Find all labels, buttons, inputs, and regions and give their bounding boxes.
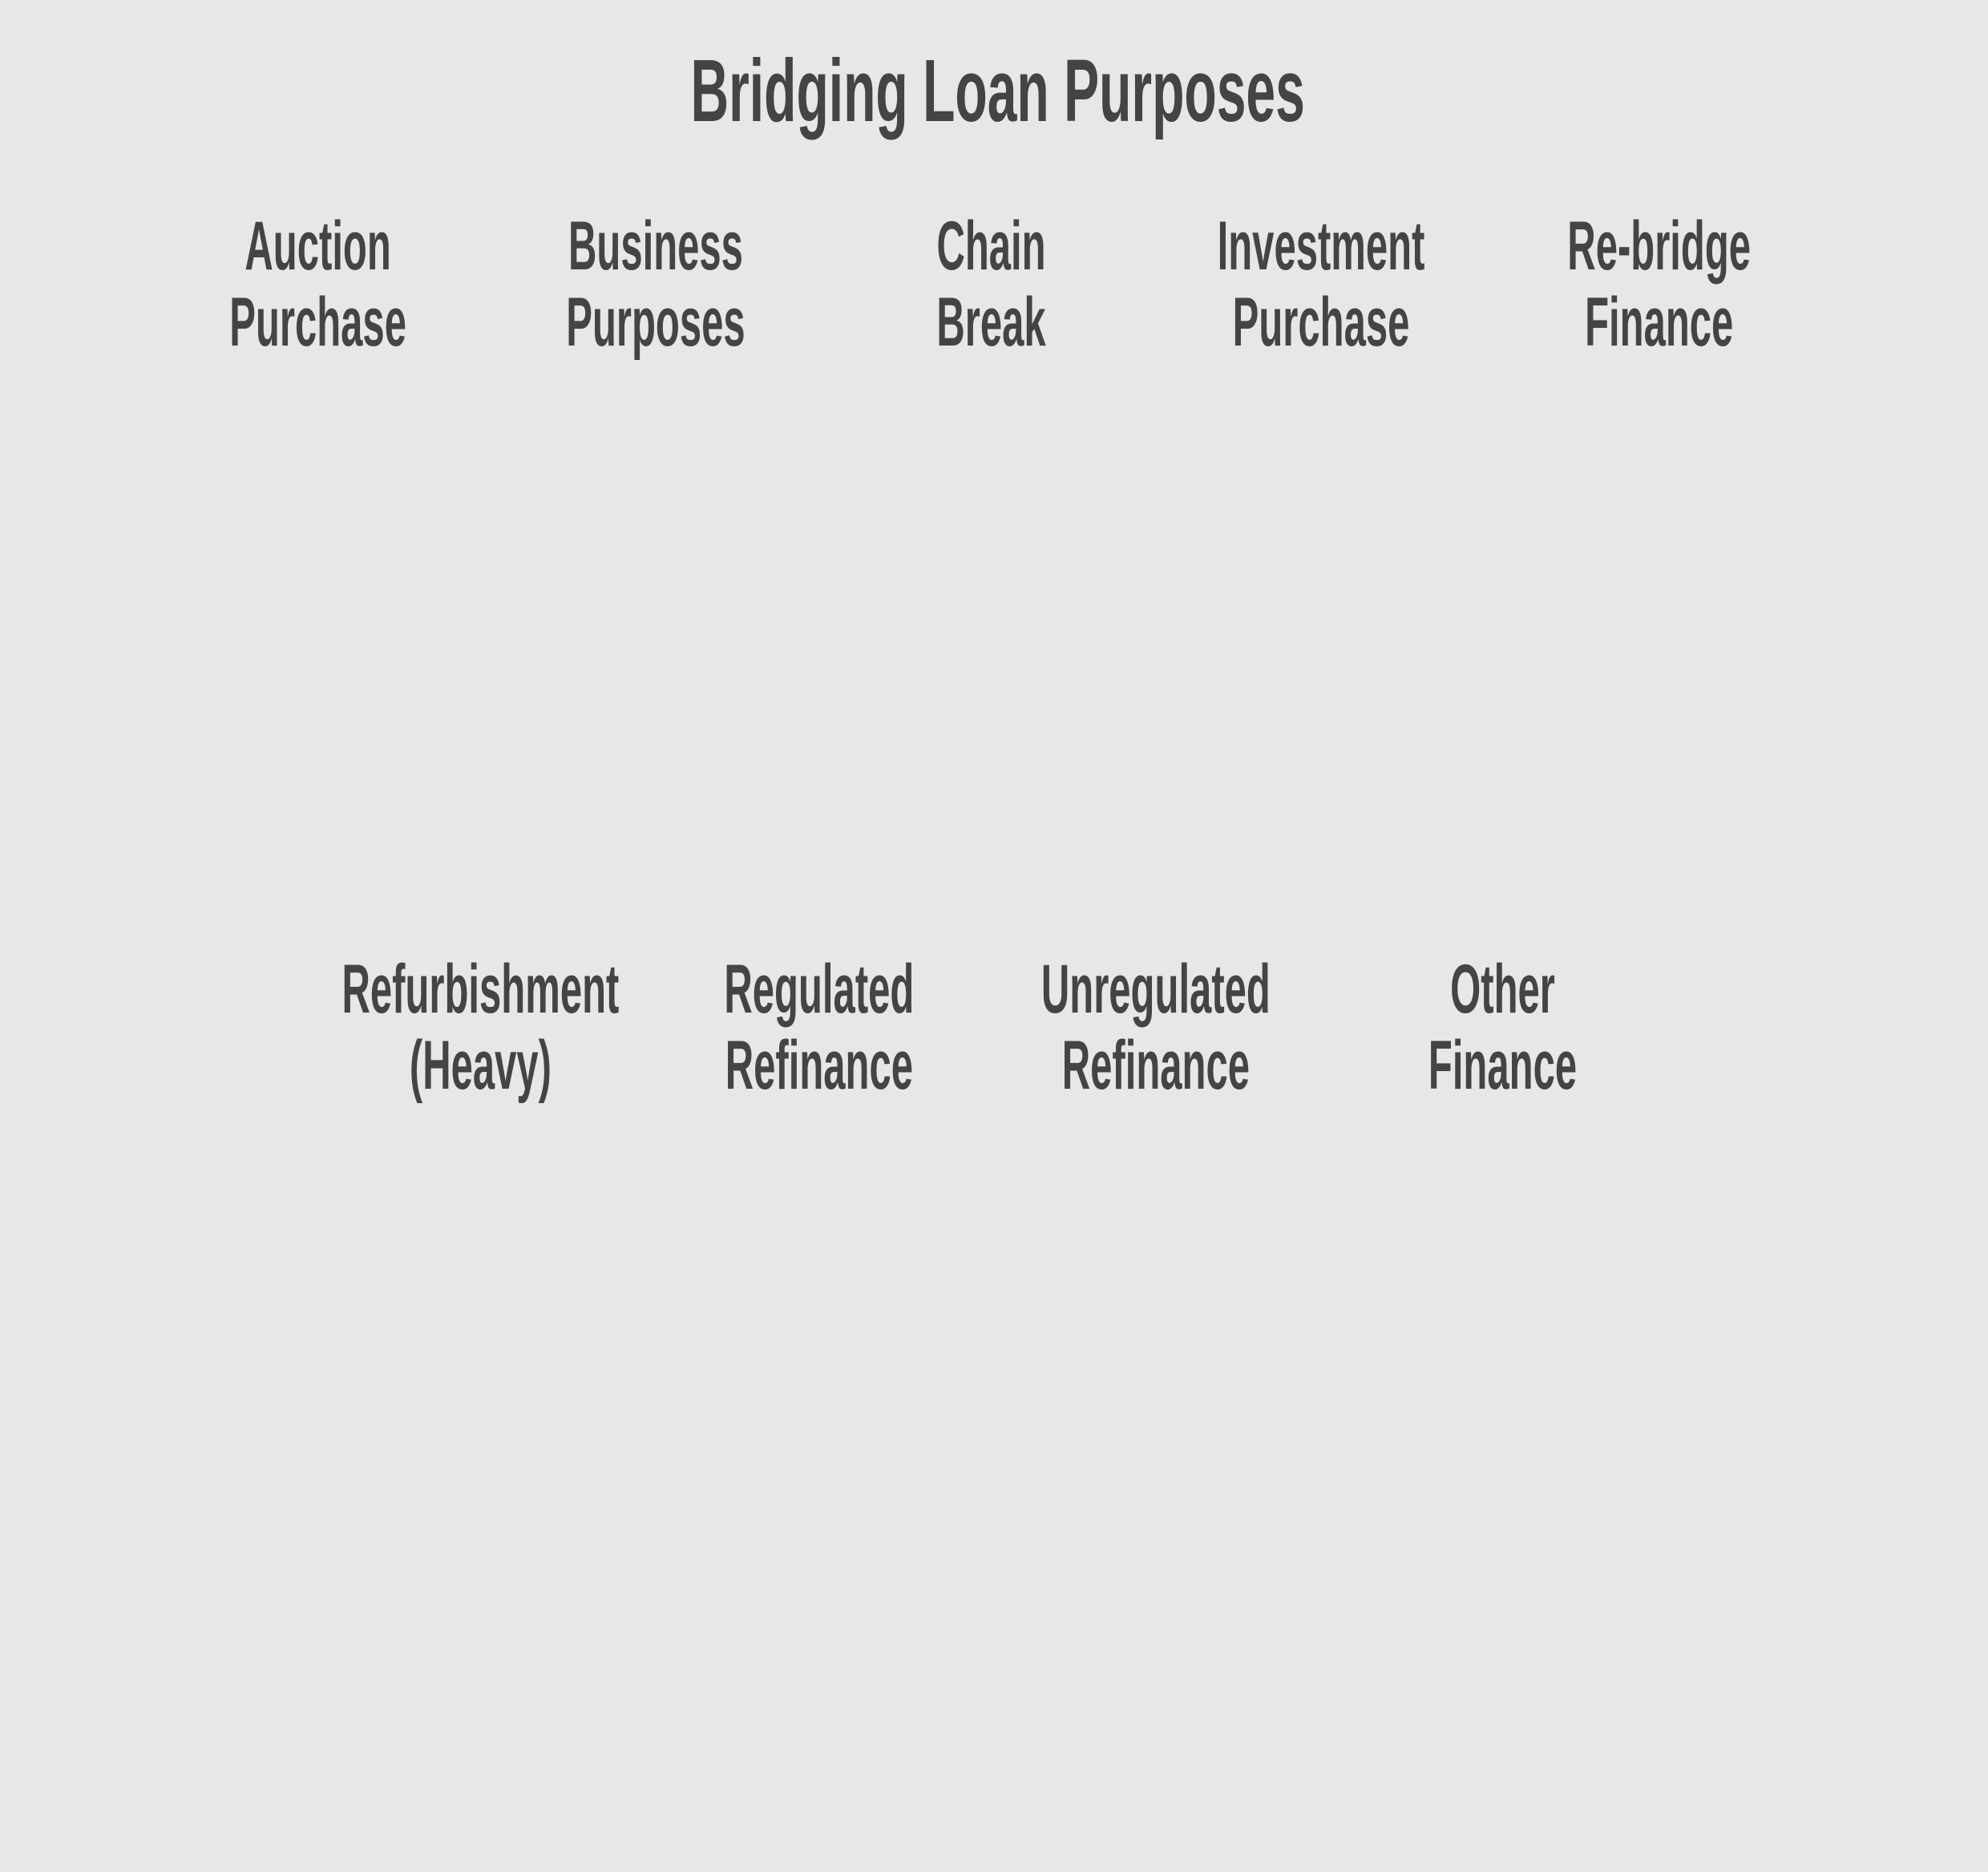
label: Unregulated Refinance xyxy=(1041,951,1271,1104)
label: Refurbishment (Heavy) xyxy=(341,951,619,1104)
label: Chain Break: Chain xyxy=(937,208,1046,285)
label: Chain Break xyxy=(937,208,1046,361)
label: Regulated Refinance: Refinance xyxy=(725,1027,913,1104)
label: Auction Purchase xyxy=(230,208,406,361)
label: Auction Purchase: Purchase xyxy=(230,284,406,361)
label: Investment Purchase: Investment xyxy=(1218,208,1424,285)
label: Investment Purchase: Purchase xyxy=(1233,284,1409,361)
label: Refurbishment (Heavy): Refurbishment xyxy=(341,951,619,1028)
label: Re-bridge Finance xyxy=(1568,208,1751,361)
label: Chain Break: Break xyxy=(937,284,1046,361)
label: Re-bridge Finance: Finance xyxy=(1585,284,1734,361)
label: Other Finance: Finance xyxy=(1428,1027,1577,1104)
label: Auction Purchase: Auction xyxy=(245,208,391,285)
label: Investment Purchase xyxy=(1218,208,1424,361)
label: Re-bridge Finance: Re-bridge xyxy=(1568,208,1751,285)
label: Unregulated Refinance: Refinance xyxy=(1062,1027,1250,1104)
label: Other Finance xyxy=(1428,951,1577,1104)
label: Other Finance: Other xyxy=(1450,951,1554,1028)
label: Business Purposes xyxy=(566,208,746,361)
label: Regulated Refinance: Regulated xyxy=(725,951,914,1028)
title: Bridging Loan Purposes xyxy=(691,42,1305,140)
label: Regulated Refinance xyxy=(725,951,914,1104)
label: Unregulated Refinance: Unregulated xyxy=(1041,951,1271,1028)
label: Business Purposes: Business xyxy=(568,208,743,285)
label: Refurbishment (Heavy): (Heavy) xyxy=(409,1027,552,1104)
label: Business Purposes: Purposes xyxy=(566,284,746,361)
